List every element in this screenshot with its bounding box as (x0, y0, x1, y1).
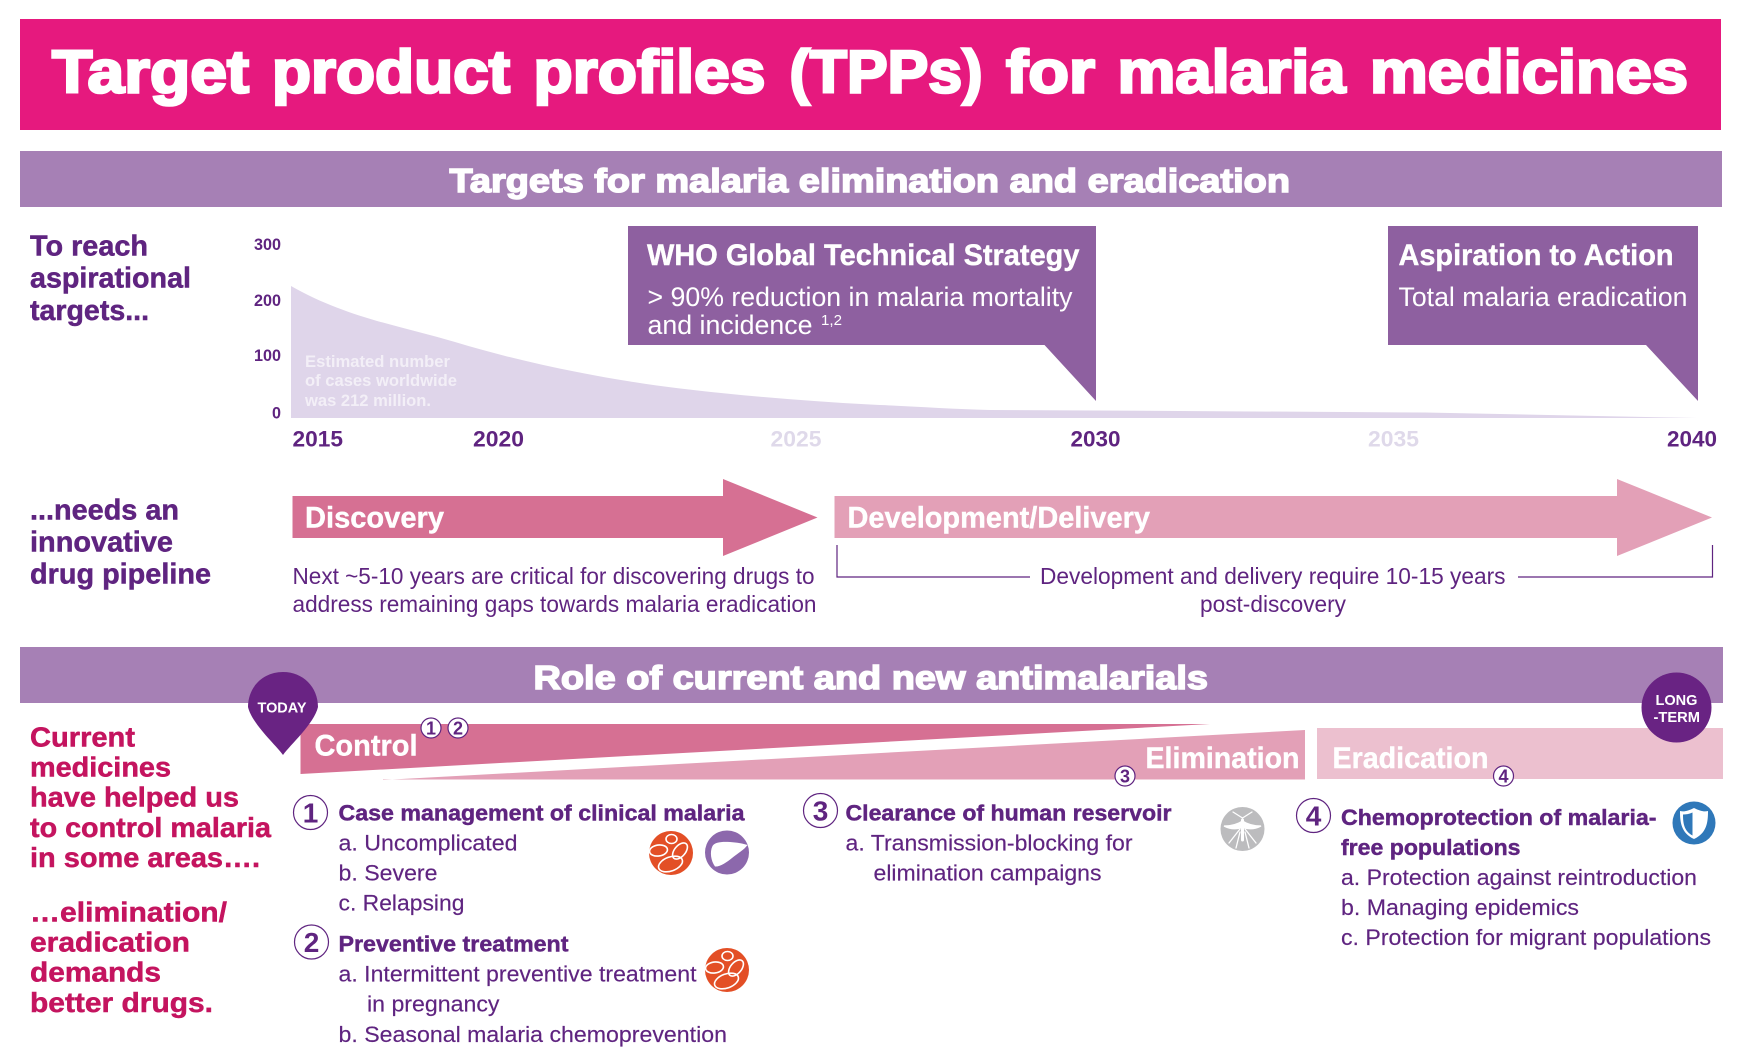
arrow: Development/Delivery: Development/Delivery (848, 502, 1151, 534)
title banner: (TPPs) (790, 38, 982, 106)
text: to reach aspirational targets: To reach (30, 230, 148, 262)
area annotation: was 212 million. (304, 392, 431, 410)
wedge: Control (300, 724, 1210, 774)
icon: liver (705, 830, 749, 874)
title banner (20, 19, 1721, 130)
list 2: preventive treatment: 2 (304, 927, 319, 958)
wedge: Elimination: Elimination (1146, 742, 1300, 775)
text: current medicines: medicines (30, 752, 171, 782)
arrow: Discovery (292, 479, 818, 556)
list 1: case management: 1 (303, 798, 318, 828)
list 4: chemoprotection (1296, 798, 1711, 950)
list 4: chemoprotection: Chemoprotection of malaria- (1341, 805, 1656, 830)
marker: LONG-TERM: LONG (1656, 692, 1698, 709)
text: discovery description (292, 563, 816, 617)
year labels: 2020 (473, 426, 524, 452)
small number badges on wedges: 2 (453, 718, 463, 738)
small number badges on wedges: 4 (1498, 766, 1509, 786)
list 1: case management: c. Relapsing (338, 890, 464, 916)
arrow: Development/Delivery (834, 479, 1712, 556)
callout: WHO Global Technical Strategy: > 90% reduction in malaria mortality (648, 282, 1073, 312)
bar: Eradication: Eradication (1332, 742, 1488, 775)
list 3: clearance of human reservoir (804, 794, 1172, 886)
icon: mosquito (1220, 807, 1264, 851)
callout: Aspiration to Action: Total malaria eradication (1398, 282, 1688, 312)
y axis labels: 100 (254, 347, 281, 365)
text: elimination demands better drugs: better drugs. (30, 987, 213, 1018)
small number badges on wedges: 3 (1120, 766, 1130, 786)
section heading: targets (20, 151, 1722, 207)
bracket and text: development description: post-discovery (1200, 591, 1346, 617)
text: current medicines (30, 722, 272, 873)
list 4: chemoprotection: a. Protection against reintroduction (1341, 865, 1697, 890)
bar: Eradication (1317, 728, 1723, 779)
list 4: chemoprotection: free populations (1341, 835, 1520, 860)
area curve (291, 286, 1697, 418)
title banner: malaria (1118, 38, 1346, 106)
text: needs an innovative drug pipeline (30, 494, 211, 590)
callout: Aspiration to Action: Aspiration to Action (1398, 239, 1674, 272)
list 3: clearance of human reservoir: Clearance of human reservoir (846, 800, 1172, 826)
list 3: clearance of human reservoir: elimination campaigns (874, 860, 1102, 886)
wedge: Elimination (383, 730, 1305, 780)
list 3: clearance of human reservoir: 3 (813, 796, 828, 826)
bracket and text: development description: Development and delivery require 10-15 years (1040, 563, 1506, 589)
text: current medicines: in some areas…. (30, 842, 260, 873)
callout: WHO Global Technical Strategy: and incidence (648, 310, 812, 340)
title banner: Target (52, 38, 249, 106)
list 1: case management: a. Uncomplicated (338, 830, 518, 856)
marker: TODAY (248, 672, 318, 755)
text: to reach aspirational targets: aspirational (30, 262, 191, 294)
y axis labels: 0 (272, 404, 281, 422)
year labels (292, 426, 1717, 452)
list 4: chemoprotection: 4 (1306, 800, 1322, 832)
section heading: role of antimalarials (20, 647, 1723, 703)
text: elimination demands better drugs: demands (30, 956, 161, 988)
list 2: preventive treatment: b. Seasonal malaria chemoprevention (338, 1022, 727, 1047)
callout: WHO Global Technical Strategy: WHO Global Technical Strategy (647, 239, 1080, 272)
marker: LONG-TERM: -TERM (1654, 709, 1700, 726)
bracket and text: development description (837, 545, 1712, 617)
year labels: 2015 (292, 426, 343, 452)
small number badges on wedges (421, 718, 1514, 786)
text: to reach aspirational targets (30, 230, 191, 327)
callout: Aspiration to Action (1388, 226, 1698, 401)
year labels: 2030 (1070, 426, 1120, 452)
marker: TODAY: TODAY (258, 700, 306, 716)
text: current medicines: to control malaria (30, 812, 272, 843)
text: elimination demands better drugs: …elimination/ (30, 896, 227, 928)
callout: WHO Global Technical Strategy (628, 226, 1096, 401)
list 1: case management: Case management of clinical malaria (338, 800, 745, 826)
icon: red blood cells (649, 831, 693, 875)
text: to reach aspirational targets: targets... (30, 295, 149, 327)
list 2: preventive treatment (294, 925, 727, 1047)
list 1: case management (294, 796, 745, 916)
area chart: estimated malaria cases (254, 236, 1717, 452)
marker: LONG-TERM (1642, 672, 1712, 742)
section heading: role of antimalarials: Role of current and new antimalarials (534, 660, 1208, 697)
icon: red blood cells (pregnancy) (705, 948, 749, 992)
arrow: Discovery: Discovery (305, 502, 445, 534)
text: current medicines: Current (30, 722, 135, 752)
year labels: 2025 (770, 426, 822, 452)
title banner: product (272, 38, 510, 106)
small number badges on wedges: 1 (426, 718, 436, 738)
text: elimination demands better drugs: eradication (30, 926, 190, 958)
text: needs an innovative drug pipeline: ...needs an (30, 494, 179, 526)
year labels: 2035 (1368, 426, 1419, 452)
year labels: 2040 (1667, 426, 1717, 452)
title banner: for (1006, 38, 1095, 106)
area annotation: Estimated number (305, 353, 451, 371)
title banner: medicines (1370, 38, 1688, 106)
text: discovery description: address remaining gaps towards malaria eradication (292, 591, 816, 617)
list 2: preventive treatment: in pregnancy (367, 992, 500, 1016)
area annotation: of cases worldwide (305, 372, 457, 390)
icon: shield (1672, 802, 1716, 844)
text: needs an innovative drug pipeline: drug pipeline (30, 558, 211, 590)
text: needs an innovative drug pipeline: innovative (30, 526, 173, 558)
list 2: preventive treatment: a. Intermittent preventive treatment (338, 962, 697, 986)
list 4: chemoprotection: c. Protection for migrant populations (1341, 925, 1711, 950)
y axis labels: 300 (254, 236, 281, 254)
text: current medicines: have helped us (30, 782, 239, 812)
y axis labels (254, 236, 281, 422)
title banner: profiles (534, 38, 766, 106)
section heading: targets: Targets for malaria elimination and eradication (450, 163, 1290, 200)
list 4: chemoprotection: b. Managing epidemics (1341, 895, 1579, 920)
text: discovery description: Next ~5-10 years are critical for discovering drugs to (292, 563, 814, 589)
y axis labels: 200 (254, 292, 281, 310)
area annotation (304, 353, 457, 410)
callout: WHO Global Technical Strategy: 1,2 (821, 312, 842, 329)
wedge: Control: Control (314, 730, 418, 762)
list 2: preventive treatment: Preventive treatment (338, 932, 569, 956)
list 1: case management: b. Severe (338, 860, 438, 886)
list 3: clearance of human reservoir: a. Transmission-blocking for (846, 830, 1133, 856)
text: elimination demands better drugs (30, 896, 227, 1018)
